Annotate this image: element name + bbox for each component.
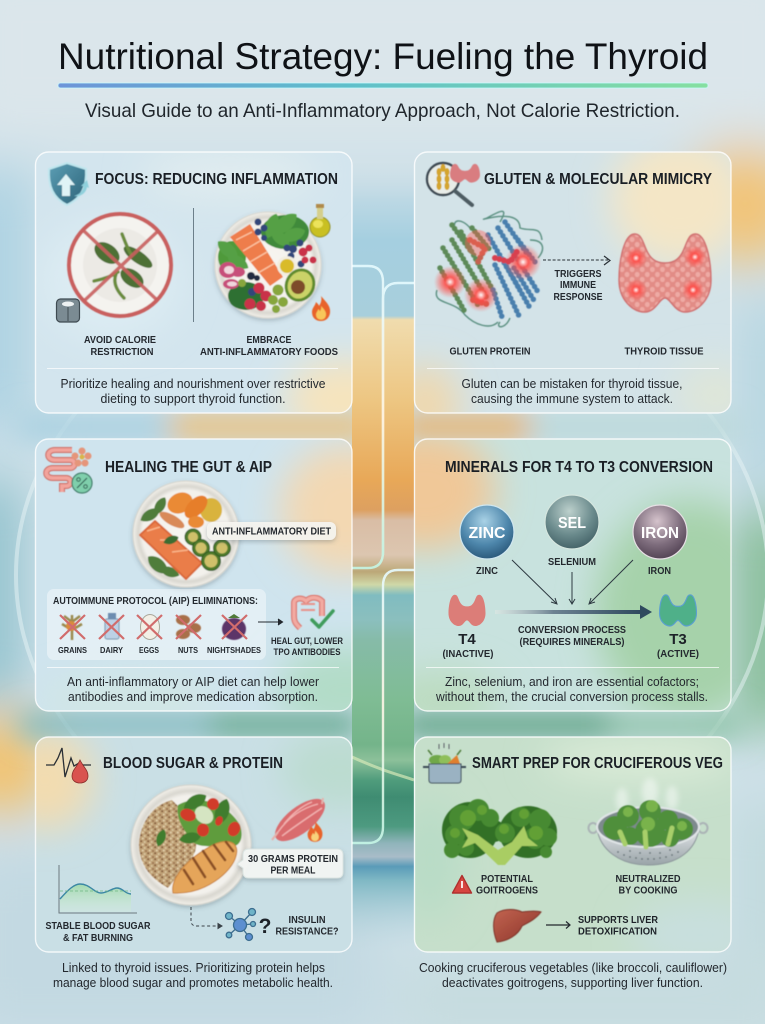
description: Prioritize healing and nourishment over restrictive (60, 376, 326, 391)
icon: magnifier with wheat and thyroid (427, 163, 480, 205)
mineral labels: SELENIUM (548, 557, 596, 568)
label: avoid calorie restriction: AVOID CALORIE (84, 335, 156, 346)
panel: smart prep for cruciferous veg (414, 736, 732, 953)
description: cruciferous: deactivates goitrogens, supporting liver function. (442, 975, 703, 990)
icon: pot with vegetables (423, 743, 466, 783)
connector lines (352, 266, 414, 843)
chart: stable blood sugar (59, 865, 137, 913)
icon: colon with check (294, 598, 333, 628)
crossed plate (69, 214, 171, 316)
title: Nutritional Strategy: Fueling the Thyroid (58, 36, 708, 77)
title underline (58, 83, 708, 88)
label: triggers immune response: IMMUNE (560, 280, 596, 291)
callout: 30 grams protein per meal: 30 GRAMS PROTEIN (248, 854, 338, 865)
sphere: iron: IRON (641, 525, 679, 542)
label: heal gut lower TPO antibodies (271, 636, 343, 658)
description (67, 674, 320, 704)
description: antibodies and improve medication absorption. (68, 689, 318, 704)
label: T4 inactive (442, 631, 494, 660)
item: dairy (99, 613, 124, 655)
icon: pulse with blood drop (46, 748, 91, 783)
panel: healing the gut and AIP (34, 438, 353, 712)
item: grains: GRAINS (58, 645, 87, 655)
heading: GLUTEN & MOLECULAR MIMICRY (484, 171, 713, 188)
icon: molecule (226, 908, 256, 940)
panel: focus reducing inflammation (34, 151, 353, 414)
label: supports liver detoxification: DETOXIFICATION (578, 926, 657, 938)
AIP eliminations box (47, 589, 266, 660)
description: An anti-inflammatory or AIP diet can help lower (67, 674, 320, 689)
icon: liver (494, 910, 541, 942)
label: conversion process: (REQUIRES MINERALS) (520, 637, 624, 648)
icon: scale (56, 299, 80, 322)
description (462, 376, 682, 406)
label: conversion process (518, 625, 626, 648)
label: triggers immune response: RESPONSE (554, 292, 603, 303)
item: dairy: DAIRY (100, 645, 123, 655)
label: neutralized by cooking: BY COOKING (618, 886, 678, 896)
description: cruciferous (419, 960, 727, 990)
label: T4 inactive: (INACTIVE) (442, 649, 494, 660)
label: supports liver detoxification (578, 915, 659, 938)
description: dieting to support thyroid function. (100, 391, 286, 406)
icon: shield (49, 163, 89, 205)
panel: blood sugar and protein (34, 736, 353, 953)
icon: T4 thyroid (448, 595, 486, 626)
icon: muscle and flame (268, 791, 332, 849)
label: potential goitrogens (476, 874, 538, 896)
label: potential goitrogens: GOITROGENS (476, 886, 538, 896)
label: T3 active: T3 (669, 631, 687, 648)
label: gluten protein: GLUTEN PROTEIN (450, 346, 530, 358)
label: insulin resistance: INSULIN (288, 915, 326, 926)
heading: BLOOD SUGAR & PROTEIN (103, 755, 283, 772)
mineral arrows (512, 560, 633, 604)
thyroid tissue (619, 234, 711, 312)
label: T3 active: (ACTIVE) (657, 649, 699, 660)
item: nightshades: NIGHTSHADES (207, 645, 261, 655)
plate: quinoa, salad, chicken (131, 785, 251, 905)
item: nuts: NUTS (178, 645, 198, 655)
label: neutralized by cooking: NEUTRALIZED (616, 874, 680, 885)
label: avoid calorie restriction: RESTRICTION (90, 347, 154, 358)
item: eggs: EGGS (139, 645, 159, 655)
salmon plate (133, 481, 239, 587)
description: blood sugar (53, 960, 333, 990)
gluten protein molecule (434, 211, 543, 327)
item: eggs (137, 614, 162, 655)
subtitle: Visual Guide to an Anti-Inflammatory Approach, Not Calorie Restriction. (85, 100, 680, 122)
item: nuts (176, 615, 201, 655)
label: heal gut lower TPO antibodies: TPO ANTIBODIES (274, 647, 340, 658)
label: neutralized by cooking (616, 874, 680, 896)
heading: FOCUS: REDUCING INFLAMMATION (95, 171, 338, 188)
label: supports liver detoxification: SUPPORTS LIVER (578, 915, 659, 926)
callout: 30 grams protein per meal: PER MEAL (270, 866, 316, 876)
panel: gluten and molecular mimicry (414, 151, 732, 414)
label: thyroid tissue: THYROID TISSUE (624, 346, 704, 358)
description: without them, the crucial conversion process stalls. (435, 689, 708, 704)
anti-inflammatory bowl (214, 209, 321, 318)
description: causing the immune system to attack. (471, 391, 673, 406)
divider (192, 208, 194, 322)
raw broccoli (442, 799, 557, 865)
description: Zinc, selenium, and iron are essential cofactors; (445, 674, 699, 689)
center gutter band (352, 150, 414, 955)
question mark: ? (259, 915, 271, 938)
label: stable blood sugar (46, 921, 151, 944)
callout: 30 grams protein per meal (237, 849, 343, 878)
cooked broccoli in colander (588, 778, 708, 865)
sphere: selenium: SEL (558, 515, 586, 532)
label: stable blood sugar: STABLE BLOOD SUGAR (46, 921, 151, 932)
mineral labels: ZINC (476, 566, 498, 577)
label: embrace foods: ANTI-INFLAMMATORY FOODS (200, 347, 338, 358)
label: avoid calorie restriction (84, 335, 156, 358)
label: heal gut lower TPO antibodies: HEAL GUT, LOWER (271, 636, 343, 647)
icon: gut with flower and badge (46, 448, 92, 493)
heading: HEALING THE GUT & AIP (105, 459, 272, 476)
heading: SMART PREP FOR CRUCIFEROUS VEG (472, 755, 723, 772)
description (435, 674, 708, 704)
icon: flame (312, 296, 330, 321)
item: grains (58, 615, 87, 655)
label: stable blood sugar: & FAT BURNING (63, 933, 133, 944)
description (60, 376, 326, 406)
label: potential goitrogens: POTENTIAL (481, 874, 533, 885)
icon: T3 thyroid (660, 595, 696, 626)
label: T4 inactive: T4 (458, 631, 476, 648)
description: cruciferous: Cooking cruciferous vegetables (like broccoli, cauliflower) (419, 960, 727, 975)
pill label: anti-inflammatory diet (207, 522, 336, 540)
heading: MINERALS FOR T4 TO T3 CONVERSION (445, 459, 713, 476)
label: insulin resistance (276, 915, 338, 938)
dashed arrow (543, 256, 610, 265)
dashed arrow to molecule (191, 907, 222, 928)
warning icon (452, 876, 472, 893)
arrow to liver support (546, 922, 570, 928)
sphere: selenium (545, 495, 599, 549)
conversion arrow (495, 605, 652, 619)
panel: minerals for T4 to T3 conversion (414, 438, 732, 712)
icon: olive oil (310, 204, 330, 237)
description: Gluten can be mistaken for thyroid tissue, (462, 376, 682, 391)
sphere: zinc: ZINC (468, 525, 506, 542)
pill label: anti-inflammatory diet: ANTI-INFLAMMATORY DIET (212, 526, 331, 538)
sphere: zinc (460, 505, 514, 559)
description: blood sugar: Linked to thyroid issues. Prioritizing protein helps (62, 960, 325, 975)
label: insulin resistance: RESISTANCE? (276, 926, 338, 938)
arrow to healed gut (258, 619, 282, 625)
label: triggers immune response: TRIGGERS (554, 269, 602, 280)
label: embrace foods (200, 335, 338, 358)
label: conversion process: CONVERSION PROCESS (518, 625, 626, 636)
mineral labels (476, 557, 671, 577)
label: T3 active (657, 631, 699, 660)
AIP eliminations box: AUTOIMMUNE PROTOCOL (AIP) ELIMINATIONS: (53, 596, 258, 607)
label: triggers immune response (554, 269, 603, 303)
mineral labels: IRON (648, 566, 671, 577)
description: blood sugar: manage blood sugar and promotes metabolic health. (53, 975, 333, 990)
sphere: iron (633, 505, 687, 559)
label: embrace foods: EMBRACE (246, 335, 292, 346)
item: nightshades (207, 614, 261, 655)
